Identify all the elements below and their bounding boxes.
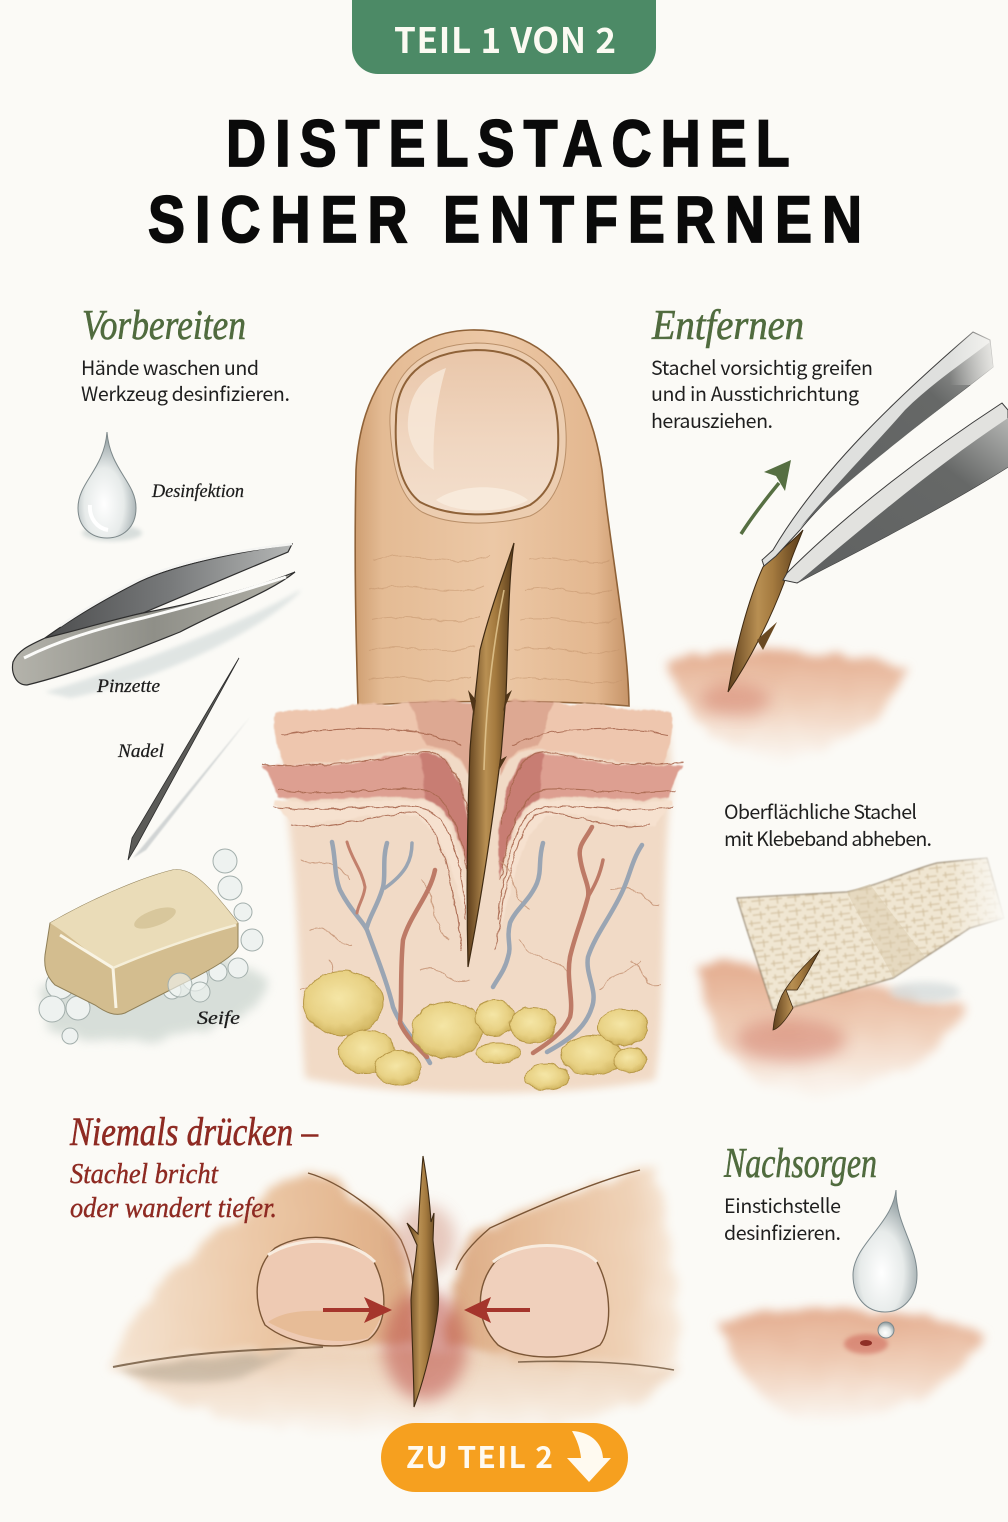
panel: aftercare heading and text: Einstichstelle <box>724 1190 841 1219</box>
skin layers, right <box>496 700 683 930</box>
blood vessels <box>332 827 642 1063</box>
tape strip <box>737 858 1004 1010</box>
icon: disinfectant drop: Desinfektion <box>151 481 244 502</box>
text: adhesive tape hint: Oberflächliche Stachel <box>724 796 917 825</box>
text: adhesive tape hint: mit Klebeband abheben. <box>724 823 932 852</box>
illustration: finger cross-section <box>262 330 683 1093</box>
panel: warning, never squeeze: Niemals drücken – <box>69 1109 319 1154</box>
thorn through tape <box>773 950 820 1030</box>
panel: Entfernen heading and text: und in Ausstichrichtung <box>651 378 859 407</box>
icon: tweezers <box>13 544 300 698</box>
panel: Entfernen heading and text: Entfernen <box>651 303 804 349</box>
right finger <box>445 1165 678 1370</box>
central thorn <box>467 543 514 967</box>
right nail <box>480 1246 609 1357</box>
icon: tweezers: Pinzette <box>96 676 160 697</box>
tweezer upper arm <box>762 332 993 566</box>
title: DISTELSTACHEL <box>226 106 790 180</box>
redness around thorn <box>383 1290 467 1400</box>
panel: Entfernen heading and text: Stachel vorsichtig greifen <box>651 352 873 381</box>
title: SICHER ENTFERNEN <box>148 182 862 256</box>
banner: Teil 1 von 2: TEIL 1 VON 2 <box>394 13 616 64</box>
icon: down arrow <box>567 1431 611 1482</box>
panel: aftercare heading and text <box>723 1141 877 1246</box>
text: adhesive tape hint <box>724 796 932 852</box>
panel: Vorbereiten heading and text: Werkzeug desinfizieren. <box>81 378 290 407</box>
pale skin below fingers <box>110 1348 680 1438</box>
panel: Vorbereiten heading and text <box>81 303 290 407</box>
left nail <box>257 1237 384 1346</box>
icon: soap: Seife <box>197 1008 240 1029</box>
icon: soap <box>39 849 270 1044</box>
illustration: tweezers pulling thorn <box>667 325 1008 758</box>
icon: disinfectant drop <box>78 432 244 541</box>
button: Zu Teil 2 <box>381 1423 628 1492</box>
arrow: squeeze left <box>323 1297 392 1323</box>
icon: needle: Nadel <box>117 741 164 762</box>
panel: Vorbereiten heading and text: Vorbereiten <box>82 303 246 349</box>
arrow: pull direction <box>741 460 791 534</box>
layer contour lines <box>262 728 683 990</box>
illustration: aftercare skin and drop <box>720 1190 985 1422</box>
skin patch <box>697 963 963 1095</box>
panel: Entfernen heading and text: herausziehen. <box>651 405 773 434</box>
icon: needle <box>117 658 250 860</box>
thorn held in tweezers <box>728 530 803 692</box>
banner: Teil 1 von 2 <box>352 0 656 74</box>
panel: aftercare heading and text: Nachsorgen <box>723 1141 877 1187</box>
dermis tissue <box>282 708 672 1093</box>
illustration: squeezing fingers <box>110 1156 680 1438</box>
panel: warning, never squeeze: Stachel bricht <box>70 1159 219 1190</box>
arrow: squeeze right <box>464 1297 530 1323</box>
fingernail <box>390 343 566 523</box>
panel: Vorbereiten heading and text: Hände waschen und <box>81 352 259 381</box>
left finger <box>113 1173 418 1367</box>
panel: aftercare heading and text: desinfizieren. <box>724 1217 841 1246</box>
title <box>148 106 862 256</box>
panel: warning, never squeeze: oder wandert tiefer. <box>70 1193 277 1224</box>
illustration: adhesive tape <box>697 850 1008 1095</box>
panel: Entfernen heading and text <box>651 303 873 434</box>
button: Zu Teil 2: ZU TEIL 2 <box>406 1433 553 1477</box>
finger <box>355 330 629 706</box>
skin patch <box>667 648 907 758</box>
tweezer lower arm <box>783 403 1008 583</box>
fat cells <box>303 971 648 1090</box>
skin layers, left <box>262 700 474 930</box>
squeezed thorn <box>407 1156 439 1407</box>
panel: warning, never squeeze <box>69 1109 319 1224</box>
tweezer handles fading out <box>950 325 1008 385</box>
